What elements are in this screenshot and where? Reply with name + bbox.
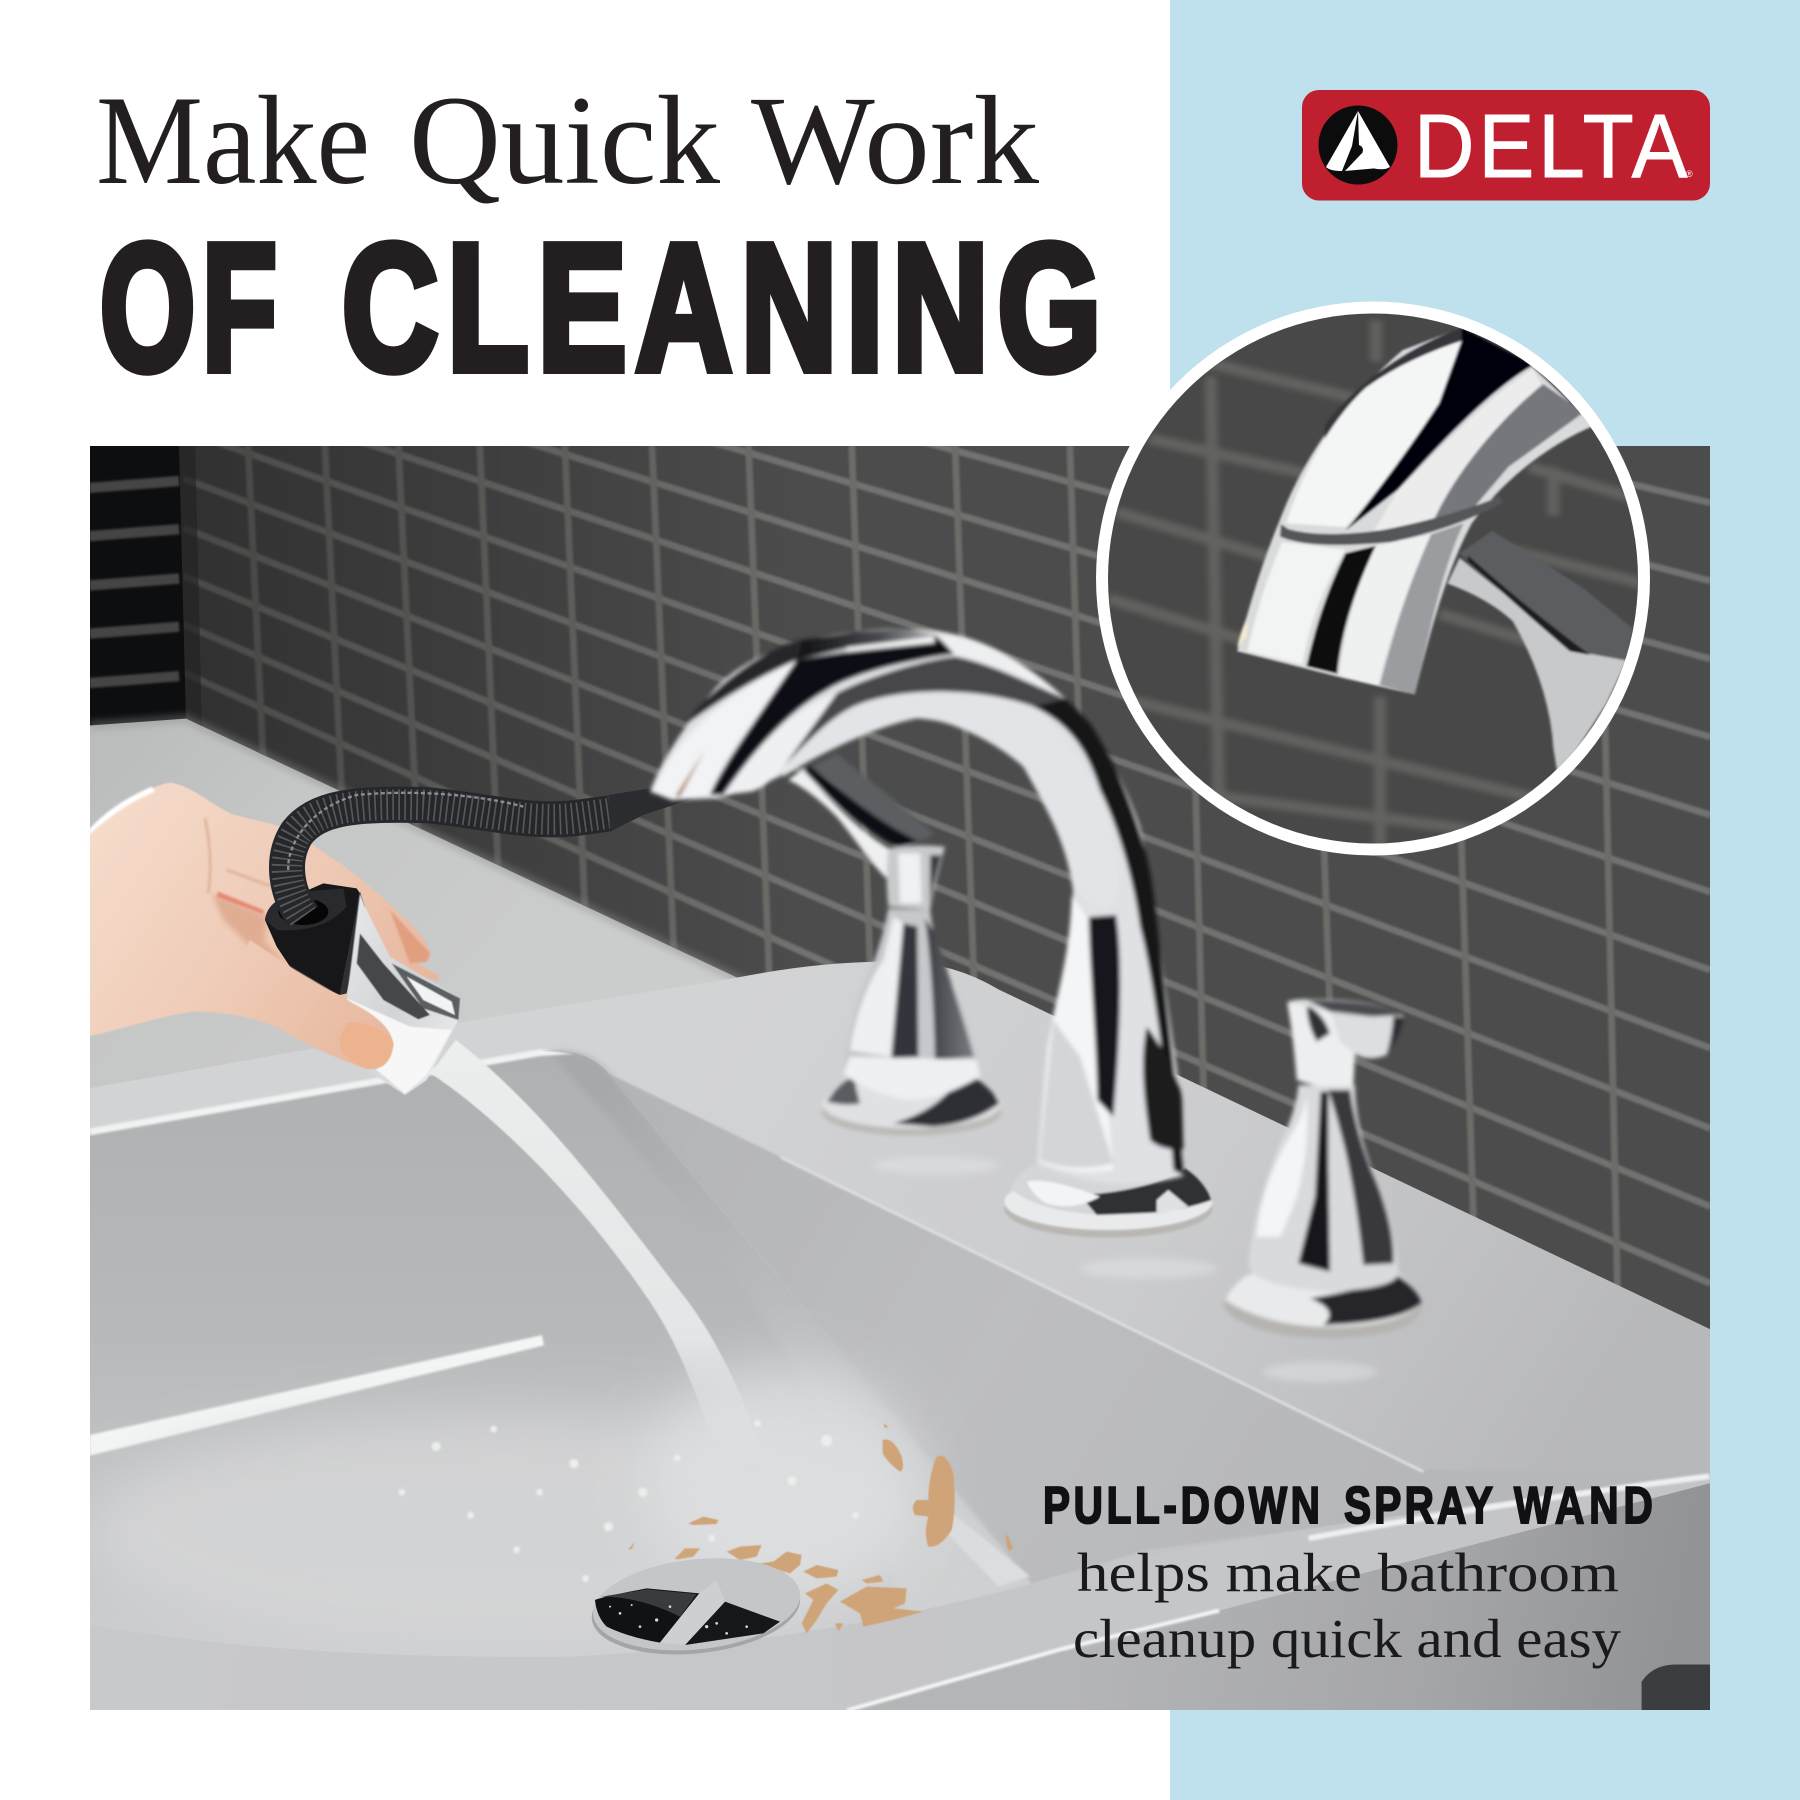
title: Make Quick Work: Make [96,71,370,211]
wall corner dark section [90,445,202,735]
top highlight [847,637,935,652]
front rim highlight [847,1611,1219,1710]
inset tile lines [1109,320,1643,854]
glint [1237,617,1247,647]
finger fold [212,893,287,965]
tip white highlight [653,660,797,800]
hand [87,783,438,1069]
lower left white [1247,542,1345,664]
panel: pale blue right column [1170,0,1800,1800]
head [887,845,945,910]
logo: Delta badge [1302,90,1710,200]
black band [1345,328,1533,531]
title: Make Quick Work: Quick [409,71,720,211]
makeup smears [628,1423,1013,1633]
main spout [650,628,1184,1184]
caption heading: PULL-DOWN [1043,1476,1320,1534]
inset: spout close-up circle [1090,290,1650,870]
reflections on counter [872,1156,1378,1382]
basin reflection streak [90,1335,544,1456]
panel: main bathroom photo [90,446,1710,1710]
logo wordmark: DELTA [1414,96,1687,197]
lower left white [1038,897,1113,1172]
water speckle [398,1420,859,1582]
lower dark patch [1143,1027,1183,1150]
caption heading: SPRAY [1344,1476,1493,1534]
black sweep [710,637,957,795]
red fold streak [217,892,263,914]
title: Make Quick Work: Work [751,71,1040,211]
upper right reflection [1374,369,1541,531]
right chrome upper [937,635,1063,699]
tub deck surface [90,718,737,1088]
left handle [788,753,1002,1136]
lower counter shelf shading [611,1075,1354,1583]
neck [1287,1003,1355,1087]
water pool [96,1404,674,1624]
right black edge [1033,698,1184,1176]
lower dark stripe [1307,546,1376,674]
caption line 1: helps make bathroom [1077,1542,1619,1603]
title: Make Quick Work [96,71,1040,211]
flange [1223,1272,1422,1338]
basin rim highlight [90,1049,574,1135]
basin corner ridge [950,1516,1029,1586]
knuckle creases [205,818,282,893]
outer dark edge [683,640,800,727]
inset spout [1237,328,1594,695]
sink basin [80,1049,1031,1657]
sink counter [90,962,1710,1710]
chrome wand head [347,893,460,1095]
flange [822,1088,1002,1136]
inset handle lever [1447,531,1633,779]
braided hose [287,793,610,917]
front rim [90,1475,1710,1710]
top band [797,628,937,660]
black collar [265,883,365,995]
shelf highlight line [781,1157,1423,1472]
bell body [843,908,980,1100]
spout flange [1004,1163,1212,1238]
inner arch light [783,692,1119,910]
icon: Delta mark [1318,106,1398,184]
wrist light edge [87,787,155,837]
deck wall shadow [90,719,758,987]
wall left shading [179,446,675,910]
caption [1043,1476,1653,1669]
spout body [650,629,1184,1184]
basin right wall [554,1048,994,1564]
thumbnail [339,1023,393,1069]
dark centre stripe [1089,915,1120,1117]
title: OF CLEANING: CLEANING [342,207,1101,408]
registered mark: ® [1686,169,1693,179]
spout seam [1280,496,1502,545]
right inner [1380,523,1464,695]
hose taper [608,788,693,832]
bell body [1248,1085,1398,1292]
lever [788,768,888,880]
drain reflections [660,1580,725,1645]
hand holding spray wand [87,783,693,1095]
dark grey mid band [783,657,1065,767]
thumb [217,940,393,1069]
lower grey reflection [1039,1020,1113,1168]
white highlight [1286,341,1462,527]
tiled wall [90,446,1710,1330]
title: OF CLEANING: OF [100,207,277,408]
lever [1287,999,1403,1058]
lever top plane [813,753,933,840]
lower mid white [1339,535,1431,685]
drain and makeup smears [587,1423,1013,1664]
tip glint [675,750,705,797]
fingertip shade [390,910,430,963]
silver tip underside [723,693,837,795]
caption heading [1043,1476,1653,1534]
outer dark edge [1325,328,1462,441]
rim upper highlight [1309,1476,1709,1538]
caption line 2: cleanup quick and easy [1073,1608,1622,1669]
pop-up drain [587,1549,805,1664]
water stream [431,1040,767,1466]
black object bottom right [1642,1665,1710,1710]
caption heading: WAND [1514,1476,1653,1534]
lower right counter [847,1483,1710,1710]
right handle [1223,999,1422,1338]
